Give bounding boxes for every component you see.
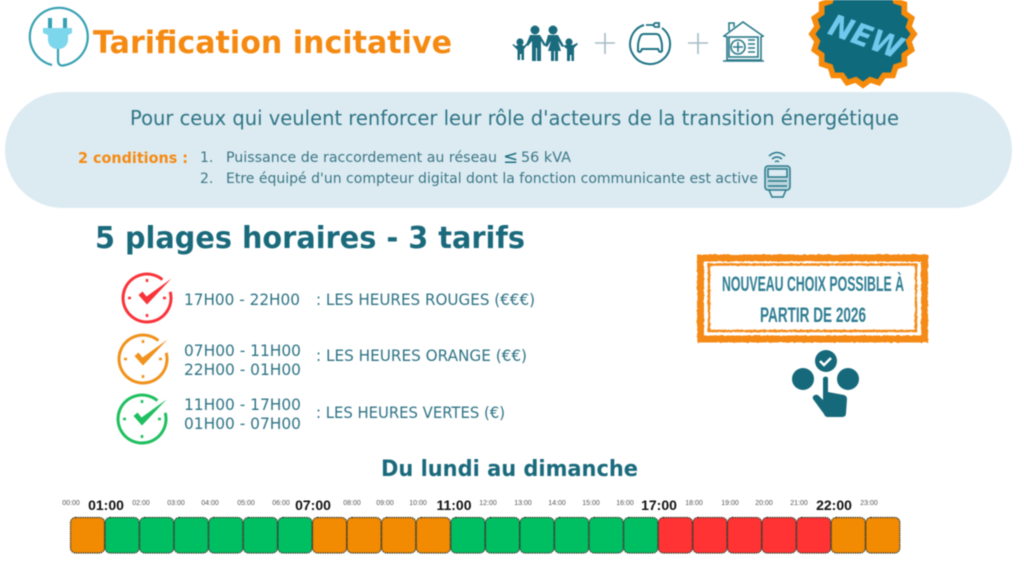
- hour labels: 21:00: [790, 500, 808, 507]
- row: green hours: [118, 395, 505, 443]
- plus sign 2: [688, 33, 708, 54]
- hour labels: 17:00: [641, 497, 677, 513]
- hour labels: 09:00: [376, 500, 394, 507]
- hour labels: 01:00: [88, 497, 124, 513]
- red label: : LES HEURES ROUGES (€€€): [316, 290, 535, 309]
- hour labels: 13:00: [514, 500, 532, 507]
- hour labels: 15:00: [582, 500, 600, 507]
- hour labels: 11:00: [436, 497, 472, 513]
- icon: family: [512, 26, 578, 61]
- badge label: NEW: [824, 8, 909, 67]
- green time ranges: 01H00 - 07H00: [184, 414, 301, 433]
- hour labels: 18:00: [685, 500, 703, 507]
- orange label: : LES HEURES ORANGE (€€): [316, 346, 527, 365]
- hour labels: 07:00: [295, 497, 331, 513]
- icon: house with heat pump: [723, 22, 764, 61]
- green label: : LES HEURES VERTES (€): [316, 403, 505, 422]
- heading: monday to sunday: Du lundi au dimanche: [381, 457, 638, 482]
- heading: 5 time slots: 5 plages horaires - 3 tarifs: [95, 221, 525, 256]
- condition 1: Puissance de raccordement au réseau: [226, 150, 497, 166]
- icon: smart meter: [765, 152, 790, 197]
- hour labels: 02:00: [132, 500, 150, 507]
- stamp: new choice from 2026: [700, 258, 924, 339]
- hour labels: 06:00: [272, 500, 290, 507]
- row: red hours: [123, 274, 535, 322]
- orange time ranges: 22H00 - 01H00: [184, 360, 301, 379]
- plus sign 1: [595, 33, 615, 54]
- hour labels: 19:00: [721, 500, 739, 507]
- hour labels: 20:00: [755, 500, 773, 507]
- timeline: [62, 497, 900, 553]
- hour labels: 10:00: [409, 500, 427, 507]
- hour labels: [62, 497, 878, 513]
- hour labels: 22:00: [816, 497, 852, 513]
- hour labels: 04:00: [201, 500, 219, 507]
- condition 2: Etre équipé d'un compteur digital dont la fonction communicante est active: [226, 171, 758, 187]
- icon: hand choosing option: [792, 350, 859, 417]
- icon: plug logo: [30, 8, 88, 66]
- red time range: 17H00 - 22H00: [184, 290, 300, 309]
- title: Tarification incitative: [93, 25, 452, 61]
- orange time ranges: 07H00 - 11H00: [184, 341, 301, 360]
- hour labels: 16:00: [616, 500, 634, 507]
- hour cells: [70, 518, 900, 553]
- hour labels: 00:00: [62, 500, 80, 507]
- condition 1: [200, 147, 571, 168]
- condition 1: 1.: [200, 150, 213, 166]
- hour labels: 05:00: [237, 500, 255, 507]
- hour labels: 08:00: [343, 500, 361, 507]
- hour labels: 03:00: [167, 500, 185, 507]
- badge: new: [809, 0, 917, 88]
- stamp text: NOUVEAU CHOIX POSSIBLE À: [722, 273, 904, 296]
- orange time ranges: [184, 341, 301, 379]
- icon: orange clock: [119, 335, 168, 383]
- panel: audience and conditions: [5, 92, 1012, 208]
- hour labels: 12:00: [479, 500, 497, 507]
- green time ranges: [184, 395, 301, 433]
- hour labels: 23:00: [860, 500, 878, 507]
- green time ranges: 11H00 - 17H00: [184, 395, 301, 414]
- condition 2: 2.: [200, 171, 213, 187]
- icon: electric car: [630, 23, 670, 64]
- banner heading: Pour ceux qui veulent renforcer leur rôle d'acteurs de la transition énergétique: [130, 106, 899, 130]
- condition 1: 56 kVA: [521, 150, 571, 166]
- stamp text: PARTIR DE 2026: [760, 304, 866, 327]
- icon: red clock: [123, 274, 172, 322]
- condition 1: ≤: [503, 147, 518, 168]
- conditions label: 2 conditions :: [78, 149, 188, 167]
- icon: green clock: [118, 395, 166, 443]
- row: orange hours: [119, 335, 527, 383]
- stamp text: [722, 273, 904, 327]
- hour labels: 14:00: [548, 500, 566, 507]
